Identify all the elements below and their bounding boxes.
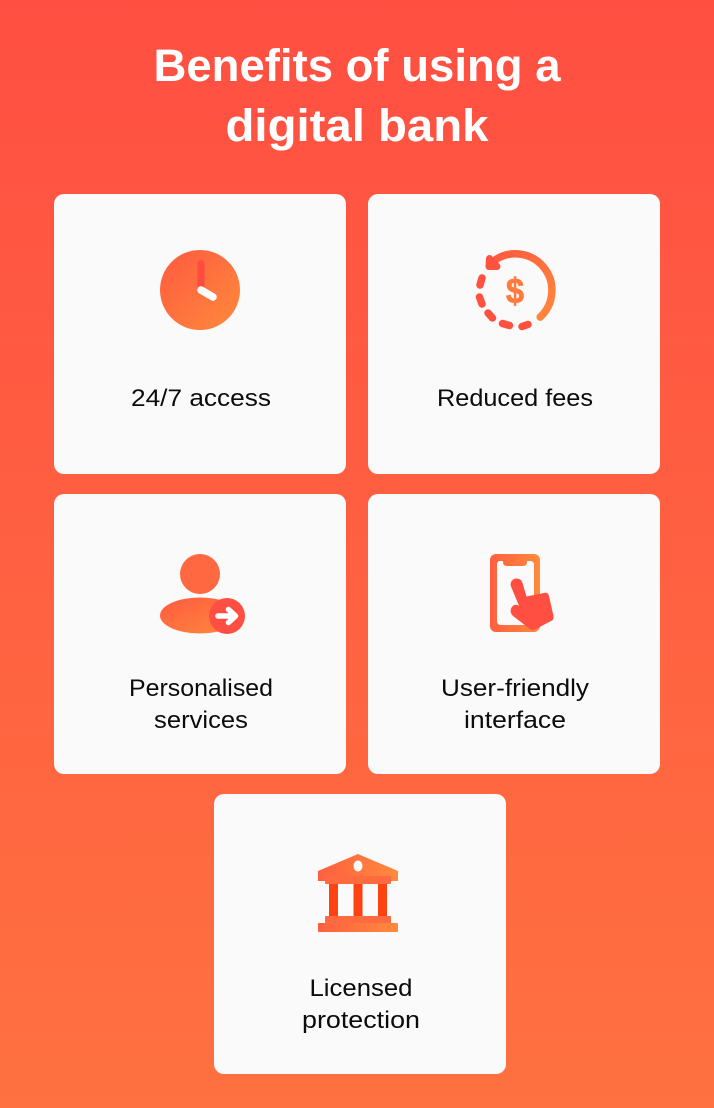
- label: interface: [464, 707, 566, 734]
- label: Reduced fees: [437, 385, 593, 412]
- icon: person with arrow: [160, 554, 245, 634]
- title: digital bank: [226, 100, 490, 151]
- label: [441, 675, 590, 734]
- label: 24/7 access: [131, 385, 271, 412]
- panel: personalised services: [54, 494, 346, 774]
- panel: user-friendly interface: [368, 494, 660, 774]
- icon: bank building: [318, 854, 398, 932]
- label: services: [154, 707, 248, 734]
- icon: circular arrow with dollar: [480, 254, 552, 326]
- panel: reduced fees: [368, 194, 660, 474]
- panel: licensed protection: [214, 794, 506, 1074]
- label: [302, 975, 420, 1034]
- icon: clock: [160, 250, 240, 330]
- icon: phone with hand: [490, 554, 554, 632]
- panel: 24/7 access: [54, 194, 346, 474]
- label: Personalised: [129, 675, 273, 702]
- label: Licensed: [310, 975, 412, 1002]
- label: [129, 675, 273, 734]
- title: [154, 40, 561, 151]
- icon: circular arrow with dollar: $: [506, 272, 524, 311]
- title: Benefits of using a: [154, 40, 561, 91]
- label: protection: [302, 1007, 420, 1034]
- label: User-friendly: [441, 675, 590, 702]
